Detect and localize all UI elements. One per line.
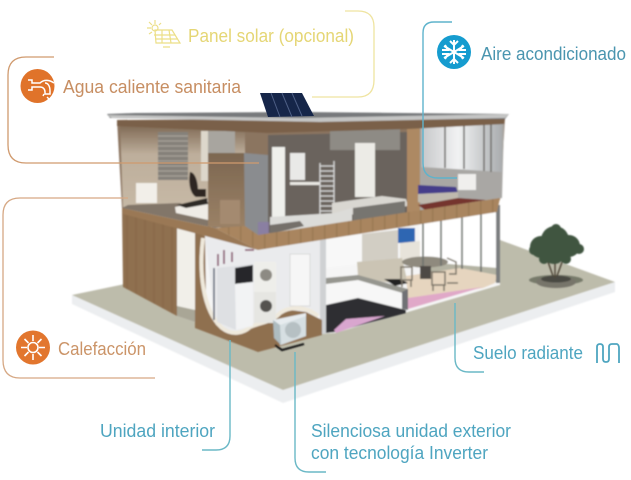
callout line: panel solar xyxy=(312,11,374,97)
house cutaway xyxy=(107,112,509,352)
tall storage tank xyxy=(244,153,268,236)
callout line: aire acondicionado xyxy=(423,22,457,178)
icon: underfloor serpentine xyxy=(597,344,619,363)
sofa xyxy=(357,258,408,284)
label: calefaccion: Calefacción xyxy=(58,339,146,359)
outdoor unit xyxy=(273,313,306,350)
label: suelo radiante: Suelo radiante xyxy=(473,343,583,363)
kitchen floor xyxy=(326,298,406,333)
right room xyxy=(407,128,422,218)
indoor unit xyxy=(214,250,254,330)
left wooden wall xyxy=(122,208,177,316)
towel radiator xyxy=(320,161,334,223)
callout line: unidad exterior xyxy=(295,352,326,472)
bathtub xyxy=(332,196,408,217)
label: unidad exterior: con tecnología Inverter xyxy=(311,443,488,463)
left bedroom wall xyxy=(120,124,245,225)
icon: faucet xyxy=(20,69,54,103)
callout line: agua caliente xyxy=(8,57,259,163)
back room white xyxy=(205,236,320,332)
label: unidad interior: Unidad interior xyxy=(100,421,215,441)
chair and bed xyxy=(175,172,208,220)
glazing mullions xyxy=(423,208,481,272)
tree xyxy=(529,224,584,288)
bathroom xyxy=(268,132,408,233)
door opening xyxy=(177,226,195,322)
label: unidad exterior: Silenciosa unidad exterior xyxy=(311,421,511,441)
dining set xyxy=(401,256,458,291)
ground floor interior xyxy=(195,205,500,335)
icon: solar panel xyxy=(147,20,180,47)
callout line: calefaccion xyxy=(3,198,155,378)
callout line: suelo radiante xyxy=(455,303,484,372)
solar panels on roof xyxy=(260,93,314,117)
wood wall with insulation xyxy=(195,232,322,352)
ground slab xyxy=(72,240,615,403)
upper floor xyxy=(117,118,505,250)
column xyxy=(320,236,326,334)
callout line: unidad interior xyxy=(202,340,230,450)
icon: snowflake xyxy=(437,35,471,69)
beige floor and pink heating xyxy=(406,268,497,299)
label: unidad exterior xyxy=(311,421,511,463)
icon: sun xyxy=(16,330,50,364)
bedroom floor xyxy=(122,203,228,228)
roof band xyxy=(117,118,505,133)
washer and dryer xyxy=(254,262,276,323)
left wall unit xyxy=(136,183,157,203)
kitchen cabinets xyxy=(326,279,406,310)
roof xyxy=(107,112,509,120)
label: aire acondicionado: Aire acondicionado xyxy=(481,44,626,64)
label: agua caliente sanitaria: Agua caliente sanitaria xyxy=(63,77,242,97)
label: panel solar: Panel solar (opcional) xyxy=(188,26,354,46)
wood partition xyxy=(208,153,245,227)
floor slab xyxy=(215,198,500,250)
